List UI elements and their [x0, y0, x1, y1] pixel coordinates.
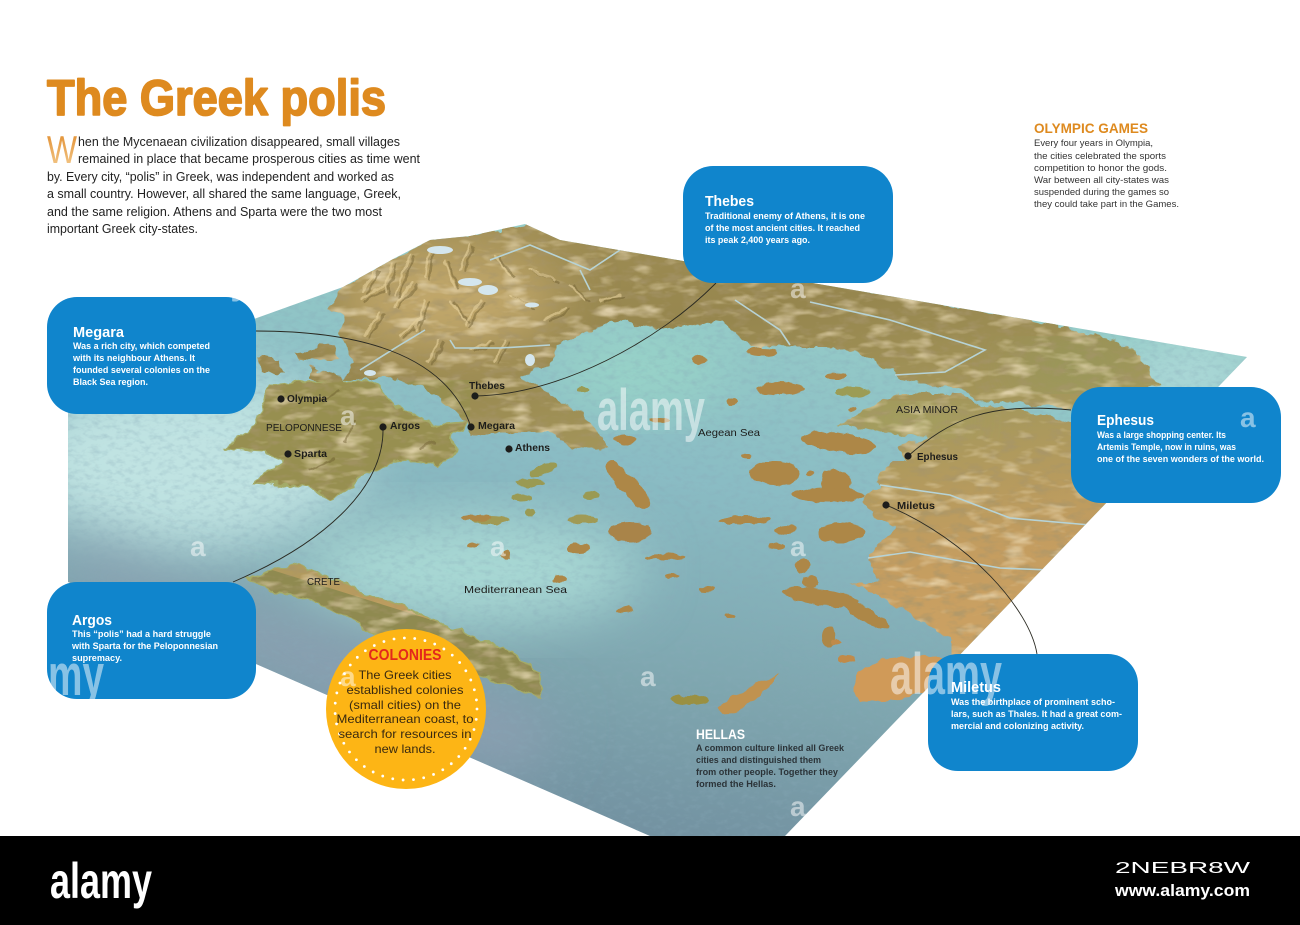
panel: Megara: Was a rich city, which competed: [73, 341, 210, 352]
city markers and map labels: CRETE: [307, 576, 340, 588]
intro text: remained in place that became prosperous cities as time went: [78, 151, 420, 166]
watermarks: a: [790, 273, 806, 304]
city markers and map labels: Miletus: [897, 500, 935, 512]
sidebar: Olympic Games: [1034, 120, 1179, 210]
intro text: [47, 129, 420, 236]
sidebar: Olympic Games: War between all city-states was: [1034, 175, 1169, 186]
watermarks: a: [340, 661, 356, 692]
callout: Hellas: [696, 726, 845, 790]
Aegean islands: [462, 348, 960, 714]
watermarks: my: [48, 643, 104, 708]
panel: Thebes: [683, 166, 893, 283]
panel: Thebes: Traditional enemy of Athens, it is one: [705, 211, 865, 222]
city markers and map labels: Ephesus: [917, 451, 958, 463]
city markers and map labels: PELOPONNESE: [266, 422, 342, 434]
city markers and map labels: Sparta: [294, 448, 327, 460]
panel: Argos: This “polis” had a hard struggle: [72, 629, 211, 640]
watermarks: alamy: [890, 642, 1002, 707]
callout: Colonies: The Greek cities: [358, 668, 452, 682]
callout: Colonies: new lands.: [374, 742, 436, 756]
panel: Megara: with its neighbour Athens. It: [72, 353, 196, 364]
sidebar: Olympic Games: Every four years in Olympia,: [1034, 138, 1153, 149]
city markers and map labels: Mediterranean Sea: [464, 584, 567, 596]
panel: Thebes: its peak 2,400 years ago.: [705, 235, 810, 246]
watermarks: [48, 258, 1256, 822]
panel: Megara: [47, 297, 256, 414]
watermarks: alamy: [597, 378, 705, 443]
watermarks: a: [490, 531, 506, 562]
panel: Miletus: Miletus: [951, 679, 1001, 696]
panel: Ephesus: Ephesus: [1097, 412, 1154, 429]
callout: Hellas: cities and distinguished them: [696, 755, 821, 766]
rivers and lakes: [360, 245, 1090, 570]
panel: Argos: [47, 582, 256, 699]
panel: Ephesus: one of the seven wonders of the world.: [1097, 454, 1264, 465]
sidebar: Olympic Games: the cities celebrated the sports: [1034, 151, 1166, 162]
sidebar: Olympic Games: OLYMPIC GAMES: [1034, 120, 1148, 136]
callout: Hellas: from other people. Together they: [696, 767, 839, 778]
city markers and map labels: Thebes: [469, 380, 505, 392]
city markers and map labels: Argos: [390, 420, 420, 432]
callout: Colonies: (small cities) on the: [349, 698, 461, 712]
intro text: hen the Mycenaean civilization disappeared, small villages: [78, 134, 400, 149]
callout: Colonies: [326, 629, 486, 789]
watermarks: a: [790, 791, 806, 822]
city markers and map labels: Athens: [515, 442, 550, 454]
mountain ridges: [310, 245, 624, 470]
callout: Colonies: search for resources in: [338, 727, 472, 741]
leader lines: [233, 283, 1071, 654]
watermarks: a: [640, 661, 656, 692]
panel: Ephesus: Was a large shopping center. Its: [1097, 430, 1226, 441]
map: relief of Greece and the Aegean: [20, 220, 1260, 840]
black footer bar: www.alamy.com: [1114, 881, 1250, 900]
watermarks: a: [340, 400, 356, 431]
black footer bar: alamy: [50, 853, 152, 909]
intro text: a small country. However, all shared the same language, Greek,: [47, 186, 401, 201]
panel: Miletus: mercial and colonizing activity.: [951, 721, 1084, 732]
panel: Megara: Black Sea region.: [73, 377, 148, 388]
watermarks: a: [1240, 402, 1256, 433]
callout: Colonies: COLONIES: [368, 647, 442, 664]
city markers and map labels: Olympia: [287, 393, 327, 405]
panel: Argos: with Sparta for the Peloponnesian: [71, 641, 218, 652]
watermarks: a: [790, 531, 806, 562]
city markers and map labels: Aegean Sea: [698, 427, 760, 439]
sidebar: Olympic Games: they could take part in the Games.: [1034, 199, 1179, 210]
city markers and map labels: [266, 380, 958, 596]
panel: Thebes: of the most ancient cities. It reached: [705, 223, 860, 234]
island: southern landmass: [853, 654, 942, 702]
coastal rim: [226, 380, 540, 697]
drop cap W: W: [47, 129, 77, 172]
black footer bar: 2NEBR8W: [1115, 860, 1252, 877]
land: mainland, Peloponnese, Crete and Asia Minor: [228, 224, 1162, 698]
intro text: and the same religion. Athens and Sparta were the two most: [47, 204, 382, 219]
sidebar: Olympic Games: suspended during the games so: [1034, 187, 1169, 198]
panel: Megara: founded several colonies on the: [73, 365, 210, 376]
sidebar: Olympic Games: competition to honor the gods.: [1034, 163, 1167, 174]
panel: Miletus: [928, 654, 1138, 771]
title: The Greek polis: [47, 70, 386, 126]
callout: Colonies: established colonies: [346, 683, 464, 697]
black footer bar: [0, 836, 1300, 925]
panel: Megara: Megara: [73, 324, 125, 341]
island: Rhodes: [718, 673, 778, 714]
panel: Ephesus: Artemis Temple, now in ruins, was: [1097, 442, 1236, 453]
sea: [60, 220, 1260, 840]
panel: Argos: supremacy.: [72, 653, 122, 664]
watermarks: a: [190, 531, 206, 562]
callout: Colonies: Mediterranean coast, to: [336, 712, 474, 726]
callout: Hellas: A common culture linked all Greek: [696, 743, 845, 754]
panel: Thebes: Thebes: [705, 193, 754, 210]
intro text: by. Every city, “polis” in Greek, was independent and worked as: [47, 169, 394, 184]
city markers and map labels: Megara: [478, 420, 515, 432]
panel: Argos: Argos: [72, 612, 112, 629]
watermarks: alamy: [150, 258, 251, 302]
panel: Ephesus: [1071, 387, 1281, 503]
city markers and map labels: ASIA MINOR: [896, 404, 958, 416]
callout: Hellas: formed the Hellas.: [696, 779, 776, 790]
callout: Hellas: HELLAS: [696, 726, 745, 742]
panel: Miletus: Was the birthplace of prominent scho-: [951, 697, 1115, 708]
panel: Miletus: lars, such as Thales. It had a great com-: [951, 709, 1122, 720]
intro text: important Greek city-states.: [47, 221, 198, 236]
